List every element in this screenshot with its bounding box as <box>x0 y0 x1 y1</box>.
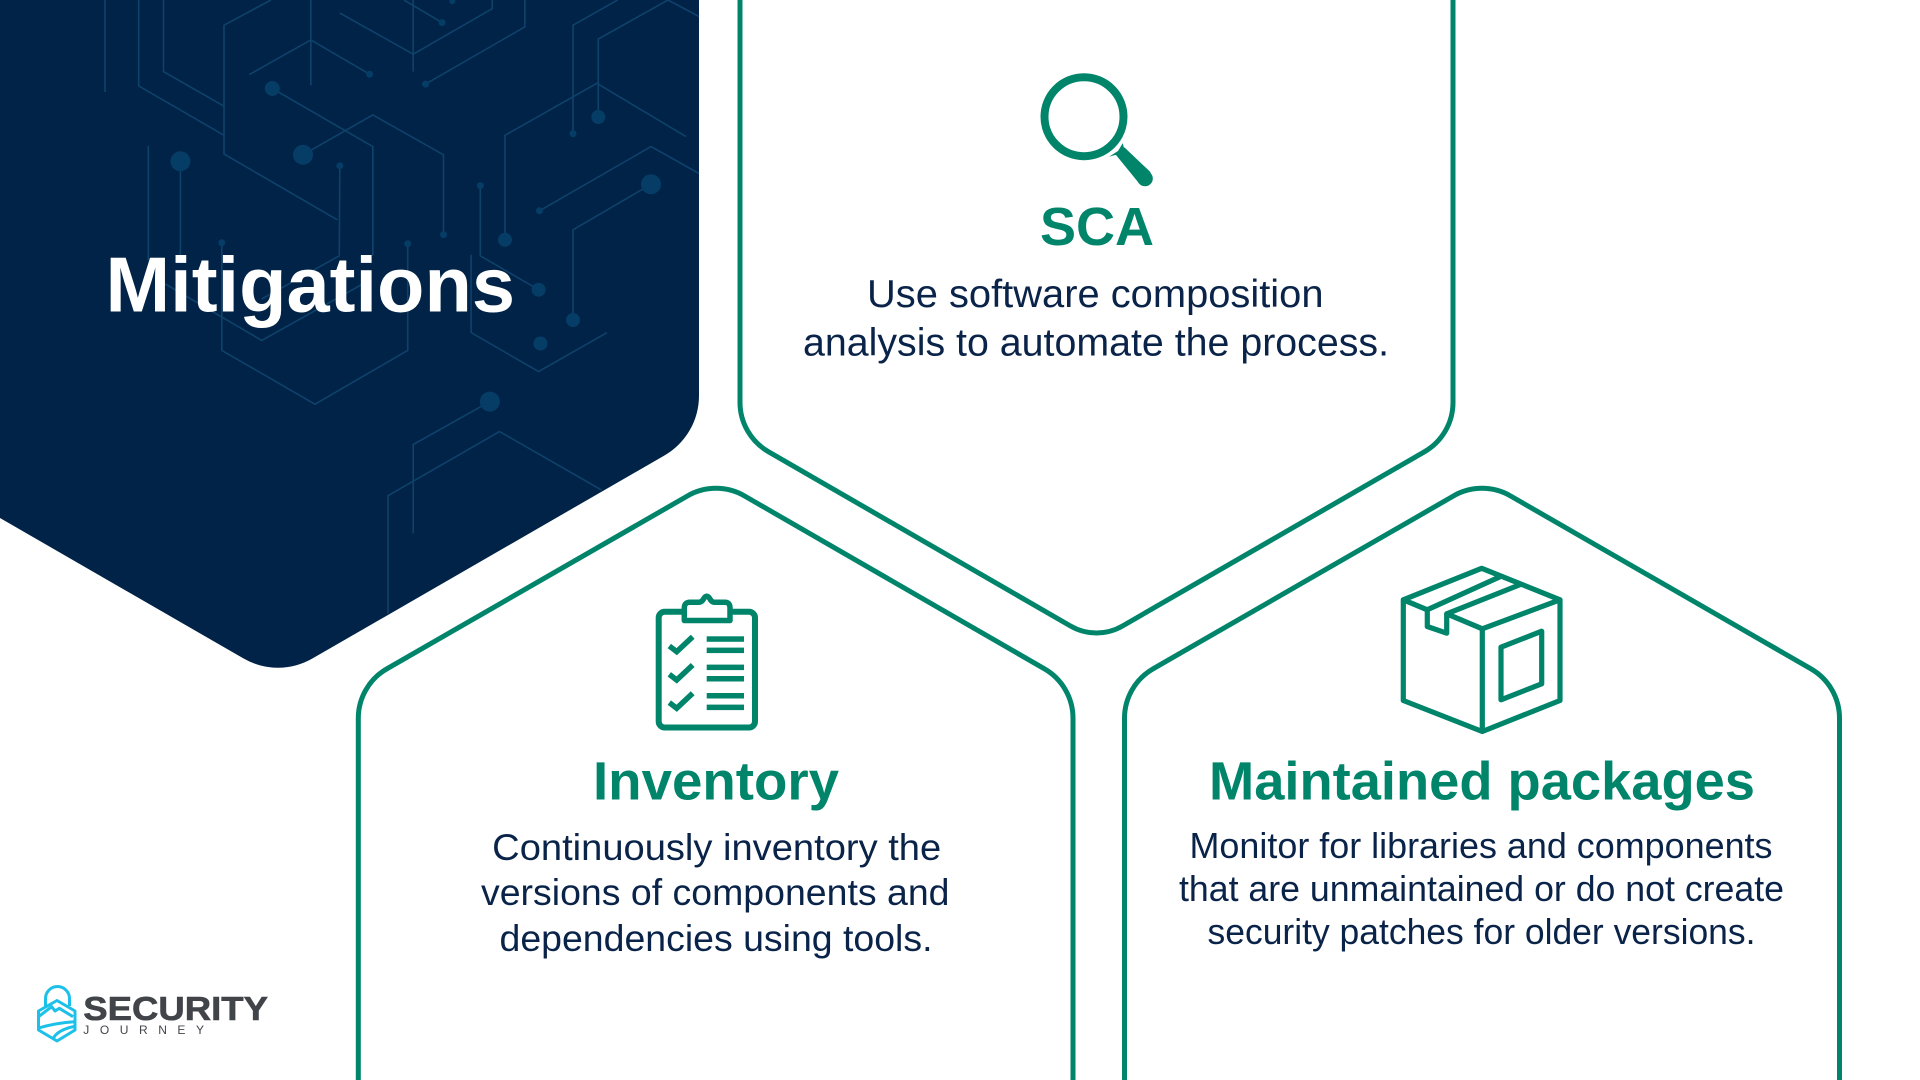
panel: Inventory <box>358 488 1073 1080</box>
text: Inventory description: Continuously inventory the <box>492 827 941 868</box>
logo wordmark: SECURITY: SECURITY <box>83 990 268 1027</box>
title: Mitigations <box>106 240 515 328</box>
text: Maintained packages description <box>1179 825 1784 952</box>
heading: Maintained packages: Maintained packages <box>1209 752 1755 812</box>
text: Inventory description: versions of components and <box>481 872 950 913</box>
panel: Maintained packages <box>1124 488 1840 1080</box>
text: Maintained packages description: Monitor for libraries and components <box>1190 825 1772 866</box>
icon: magnifying glass <box>1044 77 1153 186</box>
icon: padlock with mountains <box>38 986 75 1041</box>
heading: Inventory: Inventory <box>593 752 839 812</box>
icon: clipboard checklist <box>659 596 755 728</box>
heading: SCA: SCA <box>1040 197 1154 257</box>
icon: cardboard box <box>1403 568 1560 732</box>
panel: SCA <box>740 0 1453 633</box>
text: Maintained packages description: that are unmaintained or do not create <box>1179 868 1784 909</box>
panel: navy title hexagon <box>0 0 699 668</box>
text: Inventory description: dependencies using tools. <box>500 918 932 959</box>
logo: Security Journey <box>38 986 268 1041</box>
text: SCA description: analysis to automate the process. <box>803 322 1389 364</box>
text: Inventory description <box>481 827 950 959</box>
text: SCA description: Use software composition <box>867 273 1324 316</box>
text: Maintained packages description: security patches for older versions. <box>1208 911 1756 952</box>
text: SCA description <box>803 273 1389 364</box>
logo wordmark: JOURNEY: JOURNEY <box>83 1023 204 1037</box>
circuit pattern <box>105 0 699 614</box>
